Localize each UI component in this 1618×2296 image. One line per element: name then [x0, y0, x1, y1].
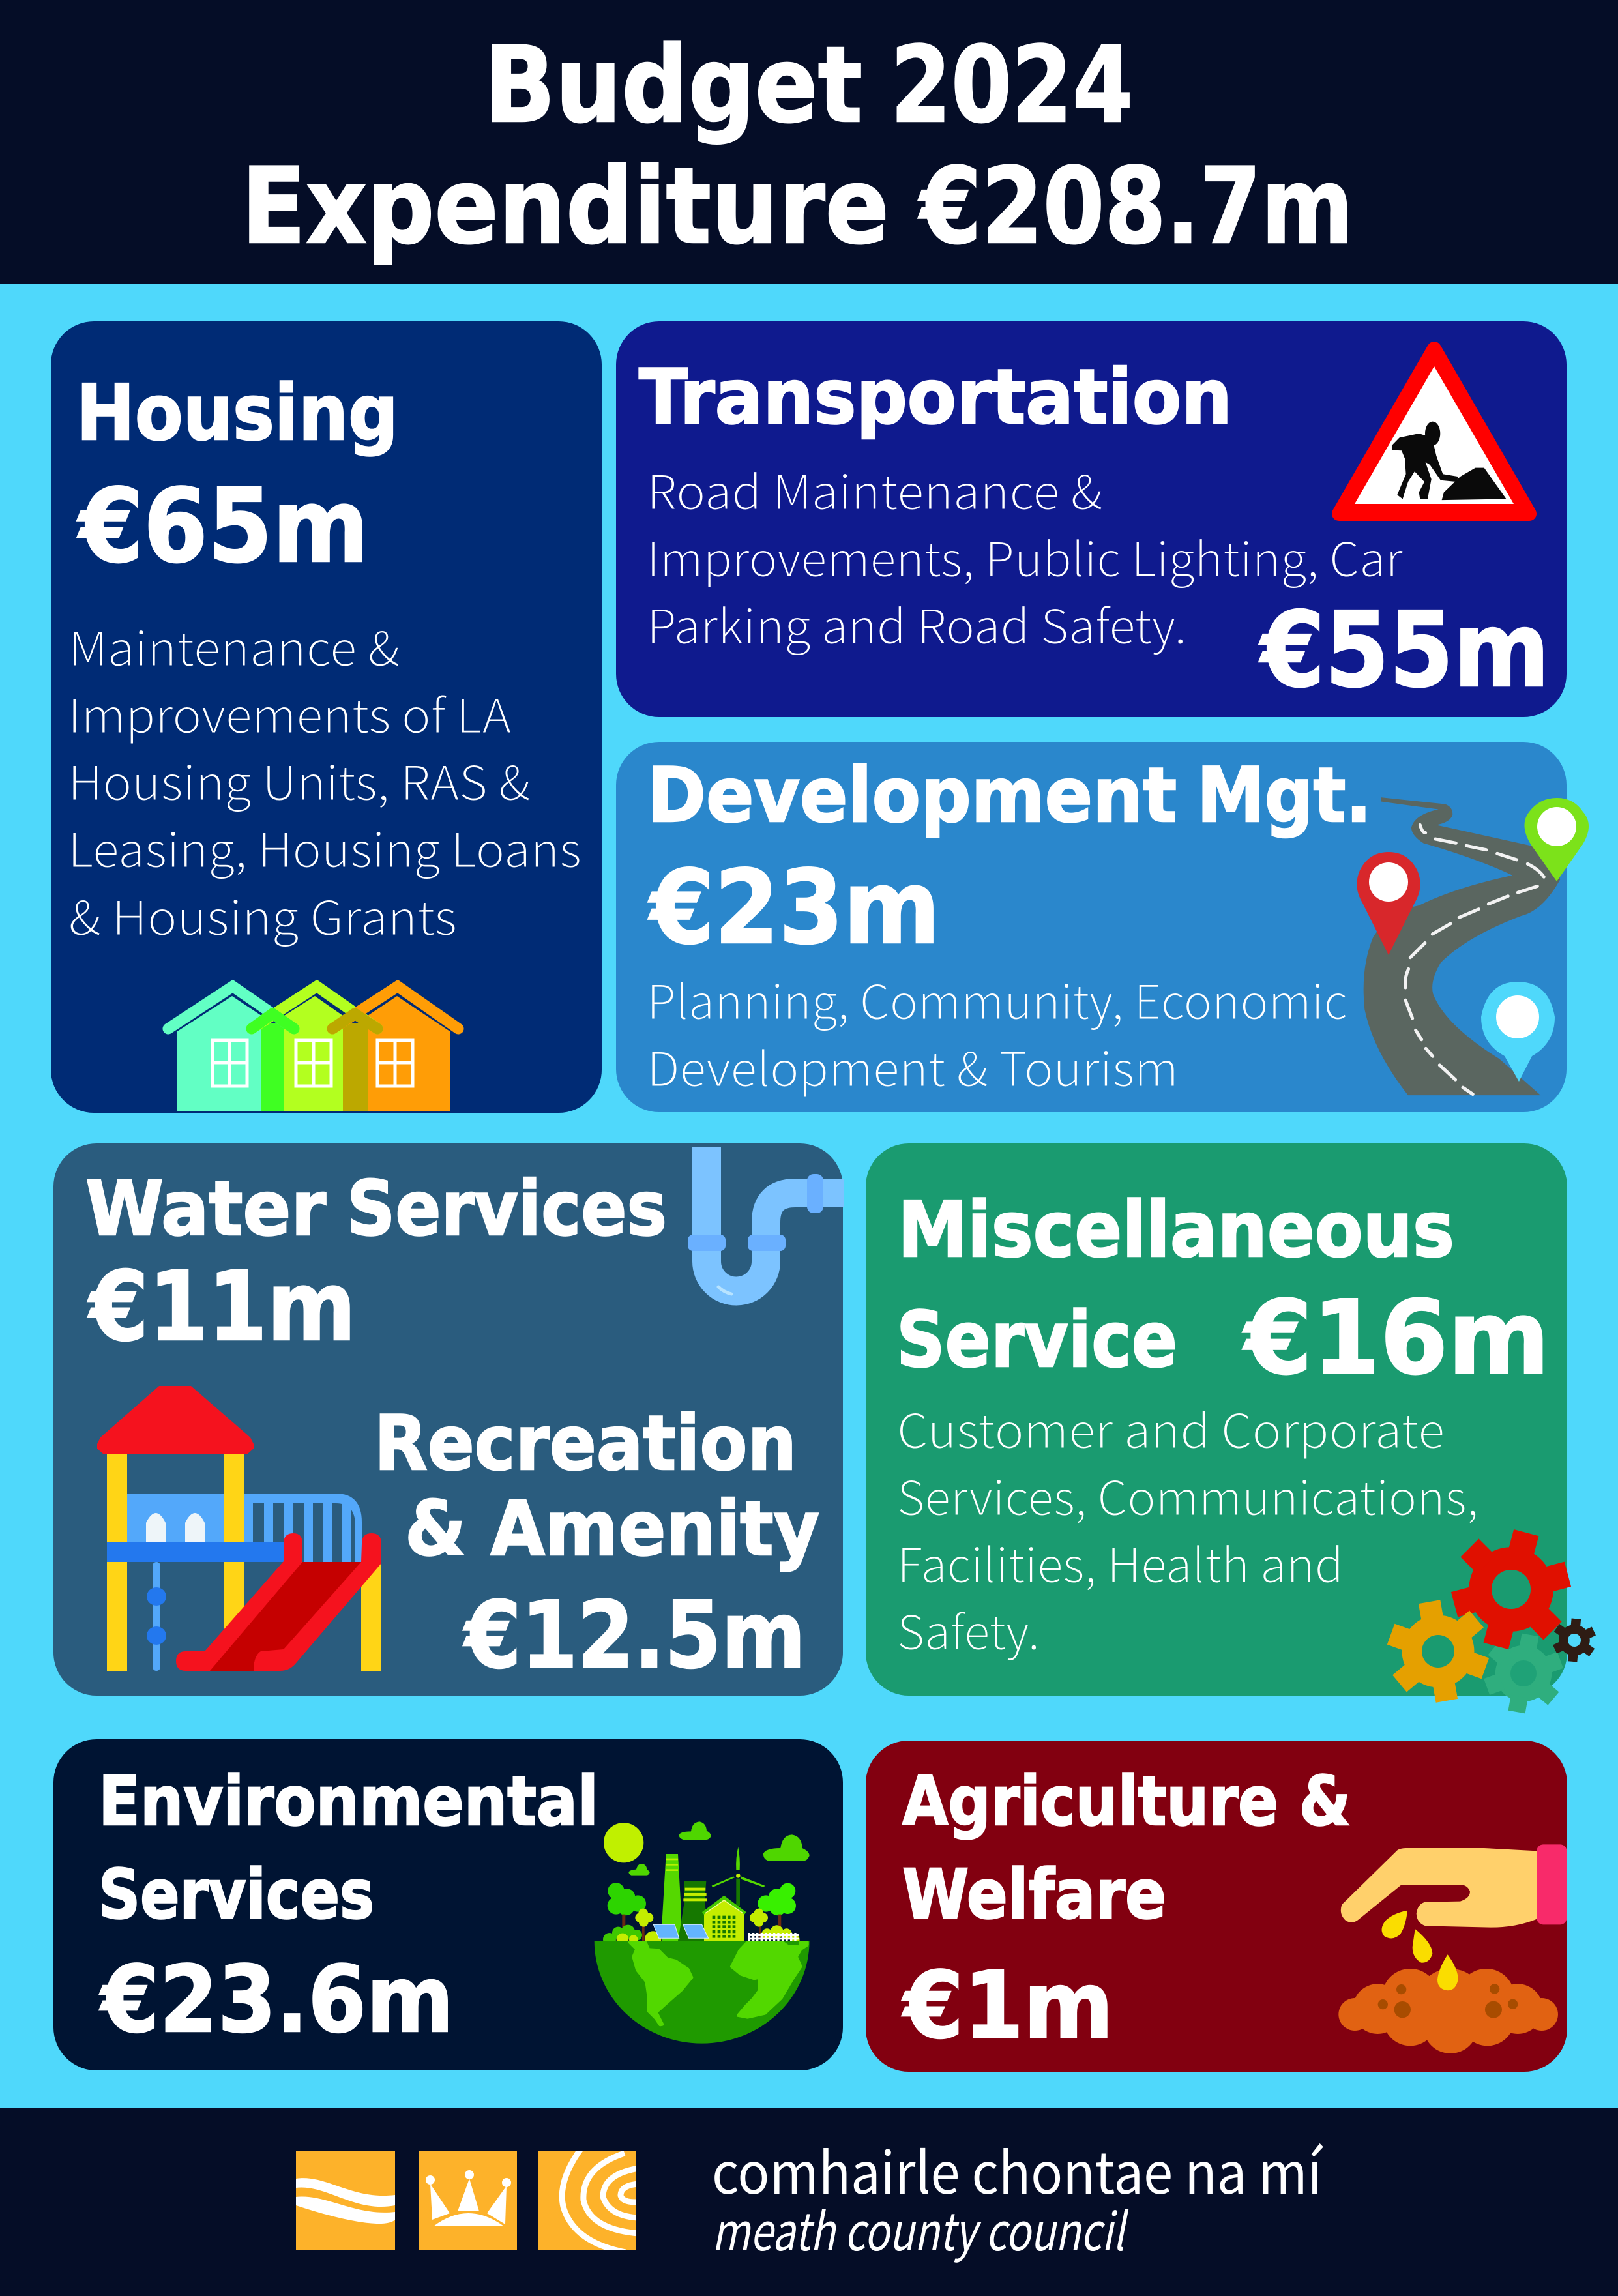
title line 1 — [484, 24, 1133, 146]
icon: row of houses — [168, 986, 458, 1111]
description: housing: Maintenance & — [68, 611, 400, 679]
panel: transportation — [616, 321, 1567, 717]
heading: recreation and amenity — [374, 1400, 819, 1573]
heading: miscellaneous service: Service — [896, 1295, 1177, 1385]
heading: miscellaneous service: Miscellaneous — [898, 1185, 1454, 1274]
logo: spiral square — [538, 2148, 639, 2252]
description: transportation: Parking and Road Safety. — [647, 589, 1186, 657]
heading: miscellaneous service — [896, 1185, 1454, 1385]
heading: water services — [85, 1165, 667, 1253]
description: housing: Improvements of LA — [68, 678, 511, 746]
heading: development management: Development — [647, 752, 1177, 840]
heading: housing: Housing — [76, 368, 398, 458]
icon: winding road with map pins — [1357, 797, 1589, 1095]
description: miscellaneous service — [897, 1393, 1478, 1663]
logo: crown square — [419, 2151, 517, 2250]
value: miscellaneous service: €16m — [1243, 1278, 1550, 1397]
panel: agriculture and welfare — [866, 1741, 1567, 2072]
title line 2 — [241, 145, 1353, 267]
title line 2: Expenditure — [241, 145, 889, 267]
description: development management: Development & Tourism — [647, 1031, 1179, 1100]
icon: water pipe — [688, 1147, 844, 1294]
icon: roadworks sign — [1339, 349, 1529, 514]
panel: water services and recreation — [53, 1143, 844, 1696]
heading: agriculture and welfare — [902, 1761, 1351, 1934]
description: transportation: Road Maintenance & — [647, 454, 1102, 523]
value: environmental services: €23.6m — [99, 1947, 454, 2053]
description: miscellaneous service: Facilities, Health and — [897, 1527, 1344, 1596]
description: transportation — [647, 454, 1404, 657]
description: housing: Leasing, Housing Loans — [68, 812, 581, 881]
council name: Irish: comhairle chontae na mí — [712, 2128, 1324, 2211]
value: housing: €65m — [77, 467, 369, 585]
header banner — [0, 0, 1618, 284]
heading: environmental services — [98, 1761, 598, 1934]
title line 2: €208.7m — [918, 145, 1353, 267]
description: miscellaneous service: Services, Communications, — [897, 1460, 1478, 1529]
title line 1: Budget — [484, 24, 862, 146]
value: recreation and amenity: €12.5m — [463, 1582, 806, 1689]
panel: development management — [616, 742, 1589, 1112]
footer banner — [0, 2108, 1618, 2296]
description: housing: & Housing Grants — [68, 880, 457, 949]
description: housing: Housing Units, RAS & — [68, 745, 530, 814]
heading: agriculture and welfare: Welfare — [902, 1855, 1166, 1934]
description: housing — [68, 611, 581, 949]
title line 1: 2024 — [890, 24, 1133, 146]
icon: hand sowing seeds into soil — [1338, 1844, 1567, 2053]
icon: playground slide — [97, 1386, 381, 1671]
heading: development management: Mgt. — [1197, 752, 1372, 840]
logo: waves square — [296, 2151, 395, 2250]
description: miscellaneous service: Safety. — [897, 1595, 1040, 1663]
council name: English: meath county council — [712, 2190, 1129, 2266]
icon: green earth with town — [595, 1821, 810, 2044]
description: miscellaneous service: Customer and Corporate — [897, 1393, 1445, 1462]
heading: environmental services: Environmental — [98, 1761, 598, 1841]
value: water services: €11m — [87, 1251, 356, 1362]
description: development management — [647, 964, 1347, 1100]
heading: environmental services: Services — [98, 1855, 374, 1934]
value: agriculture and welfare: €1m — [902, 1952, 1113, 2059]
heading: water services: Water — [85, 1165, 326, 1253]
panel: environmental services — [53, 1739, 843, 2070]
panel: housing — [51, 321, 602, 1113]
value: transportation: €55m — [1258, 590, 1550, 711]
value: development management: €23m — [648, 848, 940, 967]
panel: miscellaneous service — [866, 1143, 1597, 1718]
heading: water services: Services — [347, 1165, 667, 1253]
description: transportation: Improvements, Public Lighting, Car — [647, 522, 1404, 590]
icon: gears — [1381, 1518, 1597, 1718]
heading: transportation: Transportation — [639, 353, 1232, 441]
heading: agriculture and welfare: Agriculture & — [902, 1761, 1351, 1841]
description: development management: Planning, Community, Economic — [647, 964, 1347, 1033]
heading: recreation and amenity: & Amenity — [405, 1485, 819, 1573]
heading: recreation and amenity: Recreation — [374, 1400, 797, 1488]
